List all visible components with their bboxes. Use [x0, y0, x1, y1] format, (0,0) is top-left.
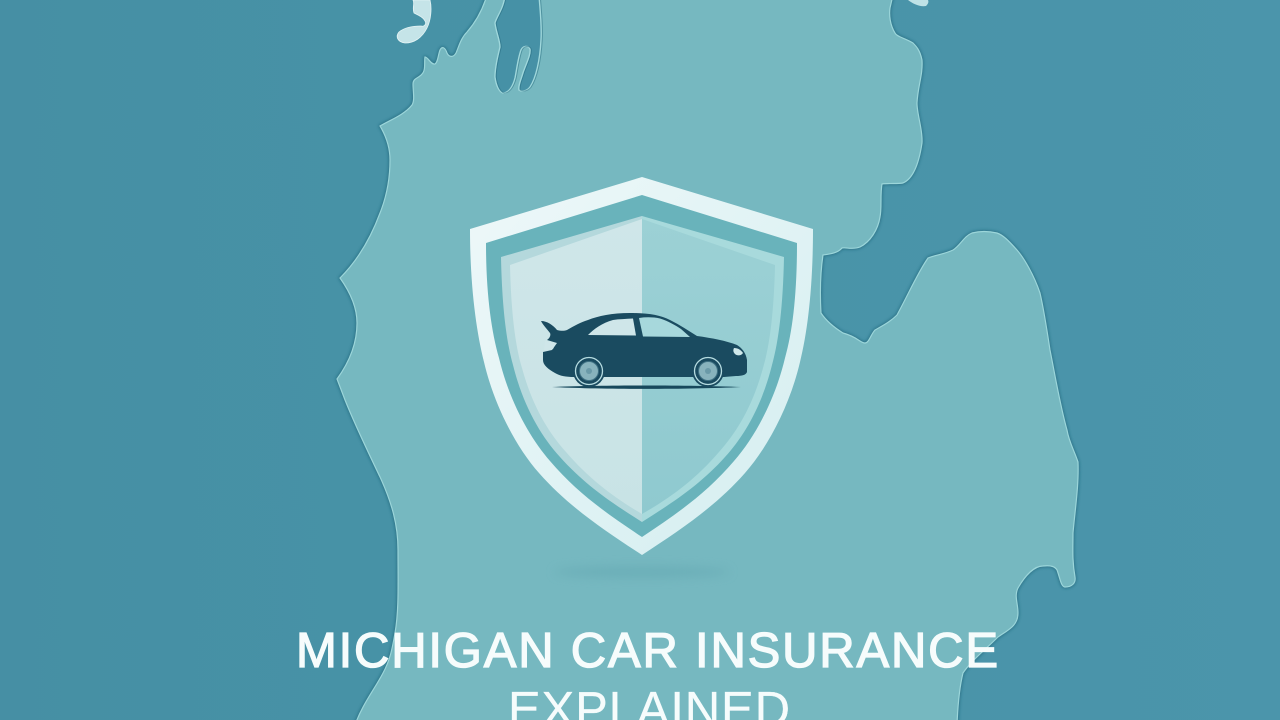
front window [639, 317, 690, 337]
shield left outer bevel [501, 216, 642, 522]
shield right panel [642, 219, 775, 514]
land fill [337, 0, 1078, 720]
headlight [733, 348, 743, 355]
shield outer rim [470, 177, 813, 555]
island: upper right small [908, 0, 928, 6]
rear window [588, 318, 636, 336]
map: Michigan lower peninsula [337, 0, 1078, 720]
shield teal band [486, 195, 797, 537]
icon: car [541, 313, 747, 389]
inland bay with peninsula [495, 0, 542, 93]
car body [541, 313, 747, 377]
shield emblem [470, 177, 813, 555]
island: upper left large [397, 0, 431, 43]
shield left panel [510, 219, 642, 514]
tail light [544, 341, 556, 351]
front wheel [692, 355, 724, 387]
land edge shadow [337, 0, 1078, 720]
title [296, 624, 998, 720]
shield ground shadow [554, 566, 730, 578]
title line 1: MICHIGAN CAR INSURANCE [296, 624, 998, 678]
shield right outer bevel [642, 216, 784, 522]
ground line [552, 386, 741, 389]
rear wheel [573, 355, 605, 387]
